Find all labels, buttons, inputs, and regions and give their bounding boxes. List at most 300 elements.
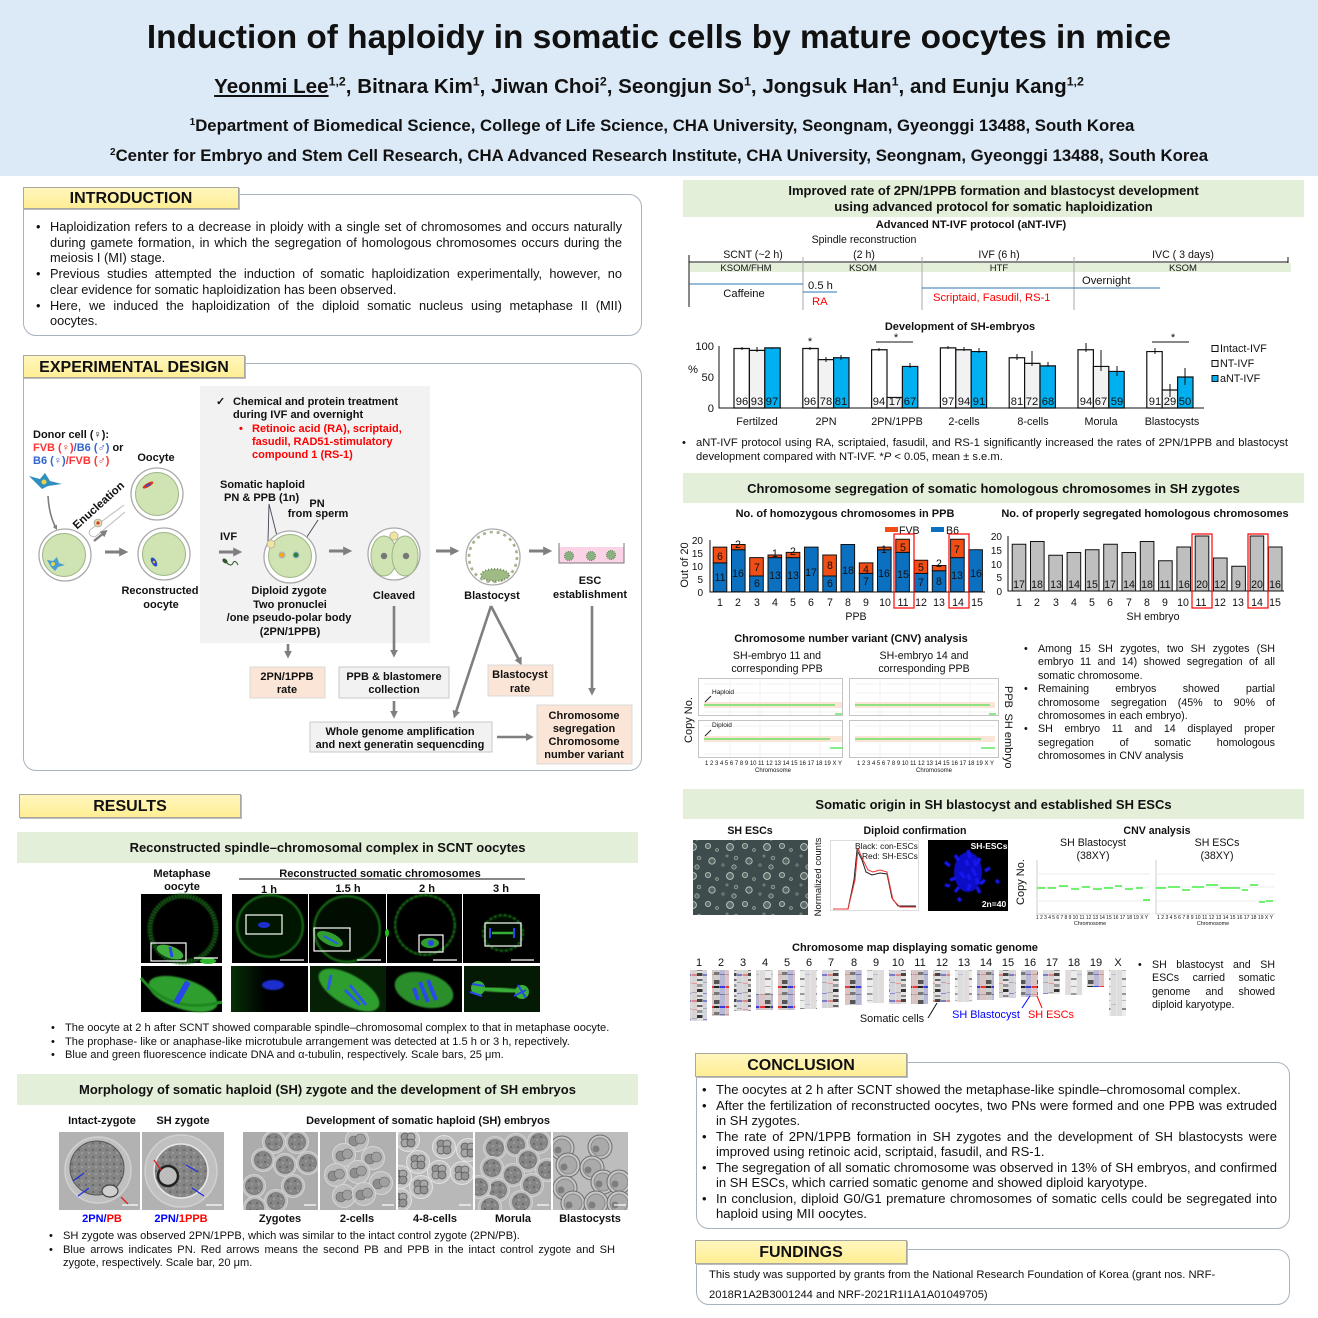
group labels: Morula <box>1084 416 1118 428</box>
axis labels: 20 <box>692 536 703 547</box>
x labels: 8 <box>1144 597 1150 609</box>
section heading: somatic origin: Somatic origin in SH blastocyst and established SH ESCs <box>815 797 1172 812</box>
map annotations: Somatic cells <box>860 1013 925 1025</box>
chart: CNV blastocyst and ESCs: SH Blastocyst <box>1060 837 1126 849</box>
chart: properly segregated chromosomes <box>991 508 1289 623</box>
chart: CNV blastocyst and ESCs: Chromosome <box>1074 921 1106 927</box>
arrow <box>529 550 548 552</box>
chromosome axes <box>705 760 995 774</box>
treatment box: during IVF and overnight <box>233 409 364 421</box>
x labels: 12 <box>915 597 927 609</box>
image: 2 h zoomed <box>386 966 462 1014</box>
y axis labels <box>991 532 1002 598</box>
axis labels: 50 <box>702 372 714 384</box>
text: introduction bullets: meiosis I (MI) stage. <box>50 250 165 265</box>
chromosome numbers: 15 <box>1002 957 1014 969</box>
cell: reconstructed oocyte <box>138 528 190 580</box>
bar values: 94 <box>873 396 885 408</box>
bar values: 29 <box>1164 396 1176 408</box>
chart: CNV blastocyst and ESCs: (38XY) <box>1201 850 1233 862</box>
text: protocol note: aNT-IVF protocol using RA, scriptaied, fasudil, and RS-1 significantly increased the rates of 2PN/1PPB and blastocyst <box>696 437 1288 449</box>
label: somatic haploid: Somatic haploid <box>220 479 305 491</box>
label: diploid zygote: (2PN/1PPB) <box>260 626 321 638</box>
text: segregation bullets: segregation of somatic homologous <box>1038 737 1275 749</box>
pipette and enucleation: Enucleation <box>71 480 127 532</box>
text: fundings <box>709 1269 1215 1301</box>
treatments: Scriptaid, Fasudil, RS-1 <box>933 292 1051 304</box>
panel: conclusion <box>695 1053 1290 1229</box>
arrow: amplification to analysis <box>497 736 530 738</box>
titles: corresponding PPB <box>731 663 823 675</box>
panel: fundings <box>695 1240 1290 1305</box>
bar values: 18 <box>1031 579 1043 591</box>
label: somatic haploid <box>220 479 348 549</box>
bar values: 7 <box>754 562 760 574</box>
phase labels: Spindle reconstruction <box>812 234 917 246</box>
axis labels: SH embryo <box>1002 713 1014 769</box>
box: blastocyst rate: Blastocyst <box>492 669 548 681</box>
label: IVF and sperm <box>219 531 238 565</box>
bar values: 14 <box>1068 579 1080 591</box>
chart: flow cytometry: Diploid confirmation <box>864 825 966 837</box>
section heading: morphology <box>17 1074 638 1105</box>
x labels: 10 <box>1177 597 1189 609</box>
bar values: 96 <box>804 396 816 408</box>
text: fundings: This study was supported by grants from the National Research Foundation of Korea (grant nos. NRF- <box>709 1269 1215 1281</box>
text: protocol note <box>682 437 1288 463</box>
image: 1 h zoomed <box>231 966 308 1012</box>
chart: CNV blastocyst and ESCs <box>1015 825 1275 927</box>
bar values: 17 <box>889 396 901 408</box>
x labels: 6 <box>1107 597 1113 609</box>
bar values: 7 <box>954 544 960 556</box>
arrow <box>329 550 348 552</box>
x labels: 11 <box>898 597 909 609</box>
image: 2 h <box>385 894 462 963</box>
bar values: 16 <box>878 568 890 580</box>
chromosome numbers: 1 <box>696 957 702 969</box>
figure: zygote and embryo morphology <box>59 1115 628 1225</box>
significance marks: * <box>808 336 813 348</box>
axis <box>1008 536 1284 591</box>
axis labels: 5 <box>697 575 703 586</box>
x labels: 1 <box>1016 597 1022 609</box>
bar values: 16 <box>732 568 744 580</box>
map title: Chromosome map displaying somatic genome <box>792 942 1038 954</box>
text: conclusion bullets: The segregation of all somatic chromosome was observed in 13% of SH embryos, and confirmed <box>716 1160 1277 1175</box>
chart: CNV blastocyst and ESCs: CNV analysis <box>1123 825 1191 837</box>
y axis labels: 10 <box>991 560 1002 571</box>
image: intact zygote <box>59 1132 140 1210</box>
box: 2PN/1PPB rate: 2PN/1PPB <box>260 671 314 683</box>
label: somatic haploid: PN <box>309 498 325 510</box>
column labels: 1 h <box>261 884 277 896</box>
chart: flow cytometry <box>813 825 966 916</box>
chromosome axes: Chromosome <box>755 768 792 774</box>
significance marks: * <box>1171 332 1176 344</box>
bar values: 72 <box>1026 396 1038 408</box>
bar values: 6 <box>717 551 723 563</box>
text: introduction bullets: Here, we induced the haploidization of the diploid somatic nucleus using metaphase II (MII) <box>50 298 622 313</box>
panel: embryo 11 PPB <box>698 678 842 716</box>
chart: CNV blastocyst and ESCs: 1 2 3 4 5 6 7 8 9 10 11 12 13 14 15 16 17 18 19 X Y <box>1157 915 1273 921</box>
bar values: 15 <box>1086 579 1098 591</box>
chromosome numbers: 10 <box>892 957 904 969</box>
timeline bar: KSOM <box>849 263 877 274</box>
group labels: Blastocysts <box>1145 416 1200 428</box>
x labels: 14 <box>952 597 964 609</box>
text: conclusion bullets: The rate of 2PN/1PPB formation in SH zygotes and the development of SH blastocysts were <box>716 1129 1277 1144</box>
bar values: 50 <box>1179 396 1191 408</box>
bar values: 8 <box>936 576 942 588</box>
treatment box: Chemical and protein treatment <box>233 396 398 408</box>
bar values: 1 <box>772 548 778 560</box>
text: introduction bullets <box>36 219 622 328</box>
column labels: Metaphase <box>153 868 211 880</box>
text: morphology bullets: Blue arrows indicates PN. Red arrows means the second PB and PPB in the intact control zygote and SH <box>63 1244 615 1256</box>
chromosome numbers: 7 <box>828 957 834 969</box>
bar values: 91 <box>973 396 985 408</box>
box: chromosome segregation and CNV: Chromosome <box>549 710 619 722</box>
text: morphology bullets: SH zygote was observed 2PN/1PPB, which was similar to the intact control zygote (2PN/PB). <box>63 1230 520 1242</box>
text: spindle bullets: The prophase- like or anaphase-like microtubule arrangement was detected at 1.5 h or 3 h, repectively. <box>65 1036 570 1048</box>
cell: cleaved embryo <box>368 528 420 580</box>
section heading: spindle complex <box>17 832 638 863</box>
bar values: 15 <box>897 569 909 581</box>
image captions: 4-8-cells <box>413 1213 457 1225</box>
label: somatic haploid: from sperm <box>288 508 348 520</box>
bar values: 11 <box>1160 579 1171 591</box>
chromosome ideograms <box>690 970 1126 1021</box>
heading: conclusion: CONCLUSION <box>747 1057 855 1074</box>
heading: results <box>19 794 241 818</box>
x labels: 15 <box>1269 597 1281 609</box>
text: segregation bullets: chromosomes in CNV analysis <box>1038 750 1184 762</box>
section heading: spindle complex: Reconstructed spindle–chromosomal complex in SCNT oocytes <box>130 840 525 855</box>
timeline bar: KSOM/FHM <box>720 263 772 274</box>
text: protocol note: development compared with NT-IVF. *P < 0.05, mean ± s.e.m. <box>696 451 1003 463</box>
x labels: 10 <box>879 597 891 609</box>
text: segregation bullets: somatic chromosome. <box>1038 670 1143 682</box>
column labels <box>68 1115 550 1127</box>
text: conclusion bullets: in SH ESCs, which carried somatic genome and showed diploid karyotype. <box>716 1175 1147 1190</box>
box: whole genome amplification: and next generatin sequencding <box>316 739 484 751</box>
panel: embryo 14 <box>850 720 998 758</box>
chromosome numbers: 12 <box>936 957 948 969</box>
significance marks <box>808 332 1189 348</box>
chart: CNV blastocyst and ESCs: Copy No. <box>1015 859 1027 905</box>
bar values: 68 <box>1042 396 1054 408</box>
protocol title: Advanced NT-IVF protocol (aNT-IVF) <box>876 219 1067 231</box>
map annotations <box>860 996 1075 1025</box>
label: somatic haploid: PN & PPB (1n) <box>224 492 300 504</box>
text: chromosome map bullet: ESCs carried somatic <box>1152 972 1275 984</box>
legend: Intact-IVF <box>1220 343 1267 355</box>
label: ESC establishment <box>553 575 627 601</box>
chart: CNV blastocyst and ESCs: Chromosome <box>1197 921 1229 927</box>
title: Induction of haploidy in somatic cells by mature oocytes in mice <box>147 19 1171 56</box>
phase labels <box>723 234 1214 261</box>
arrow: cleaved to collection <box>393 606 395 654</box>
chromosome numbers: 2 <box>718 957 724 969</box>
image: 1 h <box>232 894 308 963</box>
axis labels <box>679 536 703 599</box>
image: DAPI metaphase spread <box>928 840 1008 911</box>
panel: embryo 11 <box>698 720 843 758</box>
phase labels: (2 h) <box>853 249 875 261</box>
image captions: 2PN/1PPB <box>154 1213 208 1225</box>
bar values: 96 <box>736 396 748 408</box>
bar values: 17 <box>805 567 817 579</box>
group labels: 2-cells <box>948 416 980 428</box>
text: segregation bullets: SH embryo 11 and 14 displayed proper <box>1038 723 1275 735</box>
figure: fluorescence microscopy <box>140 868 540 1014</box>
treatments: RA <box>812 296 828 308</box>
x labels <box>717 597 983 623</box>
bar values: 16 <box>1269 579 1281 591</box>
arrow <box>436 550 455 552</box>
text: chromosome map bullet: genome and showed <box>1152 986 1275 998</box>
bar values <box>736 396 1191 408</box>
map annotations: SH ESCs <box>1028 1009 1075 1021</box>
bar values: 2 <box>735 539 741 551</box>
x labels: 5 <box>790 597 796 609</box>
x labels <box>1016 597 1281 623</box>
label: IVF and sperm: IVF <box>220 531 237 543</box>
section heading: improved rate: Improved rate of 2PN/1PPB formation and blastocyst development <box>788 183 1199 198</box>
image: 4-8-cells <box>398 1132 473 1210</box>
group labels: 2PN/1PPB <box>871 416 923 428</box>
image: SH ESCs <box>693 825 808 915</box>
column labels: 1.5 h <box>335 883 361 895</box>
axis labels: % <box>688 364 698 376</box>
bar values: 18 <box>1141 579 1153 591</box>
label: reconstructed oocyte <box>121 585 199 611</box>
text: conclusion bullets: in SH zygotes. <box>716 1113 800 1128</box>
box: blastocyst rate: rate <box>510 683 530 695</box>
x labels: 2 <box>735 597 741 609</box>
section heading: somatic origin <box>683 789 1304 819</box>
bar values: 67 <box>904 396 916 408</box>
flow diagram <box>29 386 632 764</box>
text: conclusion bullets: The oocytes at 2 h after SCNT showed the metaphase-like spindle–chromosomal complex. <box>716 1082 1241 1097</box>
group labels: 2PN <box>815 416 837 428</box>
label: reconstructed oocyte: oocyte <box>143 599 179 611</box>
text: introduction bullets: Haploidization refers to a decrease in ploidy with a single set of chromosomes and occurs naturally <box>50 219 622 234</box>
text: conclusion bullets <box>702 1082 1277 1221</box>
timeline bar: KSOM <box>1169 263 1197 274</box>
text: introduction bullets: during gamete formation, in which the segregation of homologous chromosomes occurs during the <box>50 235 622 250</box>
column labels: 3 h <box>493 883 509 895</box>
image: metaphase oocyte <box>141 894 222 964</box>
heading: experimental design: EXPERIMENTAL DESIGN <box>39 359 229 376</box>
legend: aNT-IVF <box>1220 373 1261 385</box>
x labels: 9 <box>863 597 869 609</box>
box: chromosome segregation and CNV: number variant <box>544 749 624 761</box>
chart: development of SH embryos <box>688 321 1267 428</box>
text: morphology bullets <box>49 1230 615 1269</box>
bar values: 16 <box>970 568 982 580</box>
affiliation 1: 1Department of Biomedical Science, College of Life Science, CHA University, Seongnam, Gyeonggi 13488, South Korea <box>190 116 1134 135</box>
bar values: 14 <box>1123 579 1135 591</box>
bar values <box>714 539 982 590</box>
group labels: 8-cells <box>1017 416 1049 428</box>
significance marks: * <box>894 332 899 344</box>
chart title: No. of properly segregated homologous chromosomes <box>1001 508 1289 520</box>
axis labels: 10 <box>692 562 703 573</box>
image captions: Blastocysts <box>559 1213 621 1225</box>
column labels: SH zygote <box>156 1115 210 1127</box>
heading: introduction <box>23 187 239 209</box>
box: chromosome segregation and CNV: Chromosome <box>549 736 619 748</box>
image: blastocysts <box>553 1132 628 1210</box>
heading: results: RESULTS <box>93 798 167 815</box>
text: introduction bullets: oocytes. <box>50 313 98 328</box>
x labels: 5 <box>1089 597 1095 609</box>
x labels: 4 <box>772 597 778 609</box>
bar values: 7 <box>918 577 924 589</box>
bar values: 17 <box>1104 579 1116 591</box>
donor cell label: Donor cell (♀): <box>33 429 109 441</box>
x labels: 7 <box>827 597 833 609</box>
treatment box: • <box>239 423 243 435</box>
text: fundings: 2018R1A2B3001244 and NRF-2021R1I1A1A01049705) <box>709 1289 988 1301</box>
label: diploid zygote: Two pronuclei <box>253 599 327 611</box>
titles: Chromosome number variant (CNV) analysis <box>734 633 968 645</box>
bar values: 13 <box>1050 579 1062 591</box>
icon: culture dish <box>559 543 624 563</box>
bar values: 20 <box>1251 579 1263 591</box>
panel: experimental design <box>23 355 642 771</box>
treatment box: Retinoic acid (RA), scriptaid, <box>252 423 402 435</box>
box: 2PN/1PPB rate <box>250 667 325 698</box>
chart: CNV blastocyst and ESCs: (38XY) <box>1077 850 1109 862</box>
bar values: 12 <box>1214 579 1226 591</box>
text: chromosome map bullet: SH blastocyst and SH <box>1152 959 1275 971</box>
x labels: PPB <box>845 611 867 623</box>
box: PPB and blastomere collection: PPB & blastomere <box>346 671 442 683</box>
label: reconstructed oocyte: Reconstructed <box>121 585 199 597</box>
axis labels: Copy No. <box>683 697 695 743</box>
chart: CNV blastocyst and ESCs: 1 2 3 4 5 6 7 8 9 10 11 12 13 14 15 16 17 18 19 X Y <box>1036 915 1148 921</box>
chromosome numbers: 11 <box>914 957 926 969</box>
cell: oocyte <box>131 468 183 520</box>
column labels: Reconstructed somatic chromosomes <box>279 868 481 880</box>
chromosome numbers: 19 <box>1090 957 1102 969</box>
bar values: 1 <box>881 544 887 556</box>
image: zygotes <box>243 1132 318 1210</box>
arrow <box>105 550 124 554</box>
axis labels <box>688 341 714 415</box>
cell: blastocyst <box>466 529 520 585</box>
donor cell label <box>33 429 124 467</box>
image: 2-cells <box>320 1132 396 1210</box>
text: segregation bullets: chromosomes in each embryo). <box>1038 710 1188 722</box>
bar values: 13 <box>951 570 963 582</box>
chromosome numbers: 4 <box>762 957 768 969</box>
legend: NT-IVF <box>1220 358 1255 370</box>
donor cell label: B6 (♀)/FVB (♂) <box>33 455 110 467</box>
x labels: 4 <box>1071 597 1077 609</box>
arrows: blastocyst branches <box>455 606 520 715</box>
label: ESC establishment: establishment <box>553 589 627 601</box>
x labels: 13 <box>933 597 945 609</box>
box: chromosome segregation and CNV: segregation <box>553 723 615 735</box>
image: 3 h <box>463 894 540 963</box>
x labels: 3 <box>1053 597 1059 609</box>
phase labels: SCNT (~2 h) <box>723 249 783 261</box>
bar values <box>1013 579 1281 591</box>
chart: CNV analysis <box>683 633 1014 774</box>
y axis labels: 15 <box>991 546 1002 557</box>
text: segregation bullets <box>1024 643 1275 762</box>
bar values: 11 <box>714 572 726 584</box>
chart: homozygous chromosomes in PPB <box>680 508 985 623</box>
group labels: Fertilzed <box>736 416 778 428</box>
legend: B6 <box>946 525 959 537</box>
treatments: 0.5 h <box>808 280 833 292</box>
axis <box>710 540 985 592</box>
axis labels: 0 <box>697 588 703 599</box>
figure: SH ESC characterization <box>693 825 1275 927</box>
heading: fundings: FUNDINGS <box>759 1244 843 1261</box>
heading: experimental design <box>23 355 245 378</box>
x labels: 3 <box>754 597 760 609</box>
treatments: Overnight <box>1082 275 1131 287</box>
x labels: 13 <box>1232 597 1244 609</box>
chromosome numbers: 9 <box>873 957 879 969</box>
y axis labels: 5 <box>996 573 1002 584</box>
section heading: morphology: Morphology of somatic haploid (SH) zygote and the development of SH embryos <box>79 1082 576 1097</box>
chart: chromosome map <box>690 942 1126 1025</box>
box: blastocyst rate <box>488 665 553 696</box>
text: chromosome map bullet <box>1138 959 1275 1011</box>
titles: corresponding PPB <box>878 663 970 675</box>
treatment box: fasudil, RAD51-stimulatory <box>252 436 393 448</box>
label: diploid zygote: Diploid zygote <box>251 585 327 597</box>
x labels: 15 <box>971 597 983 609</box>
legend: FVB <box>899 525 920 537</box>
bar values: 97 <box>766 396 778 408</box>
text: conclusion bullets: haploid using MII oocytes. <box>716 1206 867 1221</box>
x labels: 12 <box>1214 597 1226 609</box>
bar values: 91 <box>1149 396 1161 408</box>
highlight boxes <box>1192 534 1268 608</box>
text: segregation bullets: chromosome segregation (45% to 90% of <box>1038 697 1275 709</box>
bar values: 20 <box>1196 579 1208 591</box>
bar values: 6 <box>754 578 760 590</box>
column labels <box>153 868 525 896</box>
panel: introduction <box>23 187 642 336</box>
chromosome numbers <box>696 957 1122 969</box>
chromosome axes: Chromosome <box>916 768 953 774</box>
bar values: 17 <box>1013 579 1025 591</box>
bar values: 13 <box>769 570 781 582</box>
phase labels: IVF (6 h) <box>978 249 1020 261</box>
text: morphology bullets: zygote, respectively. Scale bar, 20 μm. <box>63 1257 252 1269</box>
text: conclusion bullets: After the fertilization of reconstructed oocytes, two PNs were formed and one PPB was extruded <box>716 1098 1277 1113</box>
x labels: 8 <box>845 597 851 609</box>
highlight boxes <box>894 534 969 608</box>
box: 2PN/1PPB rate: rate <box>277 684 297 696</box>
section heading: improved rate <box>683 180 1304 217</box>
bars <box>1012 536 1282 591</box>
box: whole genome amplification: Whole genome amplification <box>325 726 475 738</box>
bar values: 13 <box>787 570 799 582</box>
label: diploid zygote: /one pseudo-polar body <box>227 612 352 624</box>
bar values: 5 <box>918 562 924 574</box>
box: whole genome amplification <box>310 722 492 752</box>
